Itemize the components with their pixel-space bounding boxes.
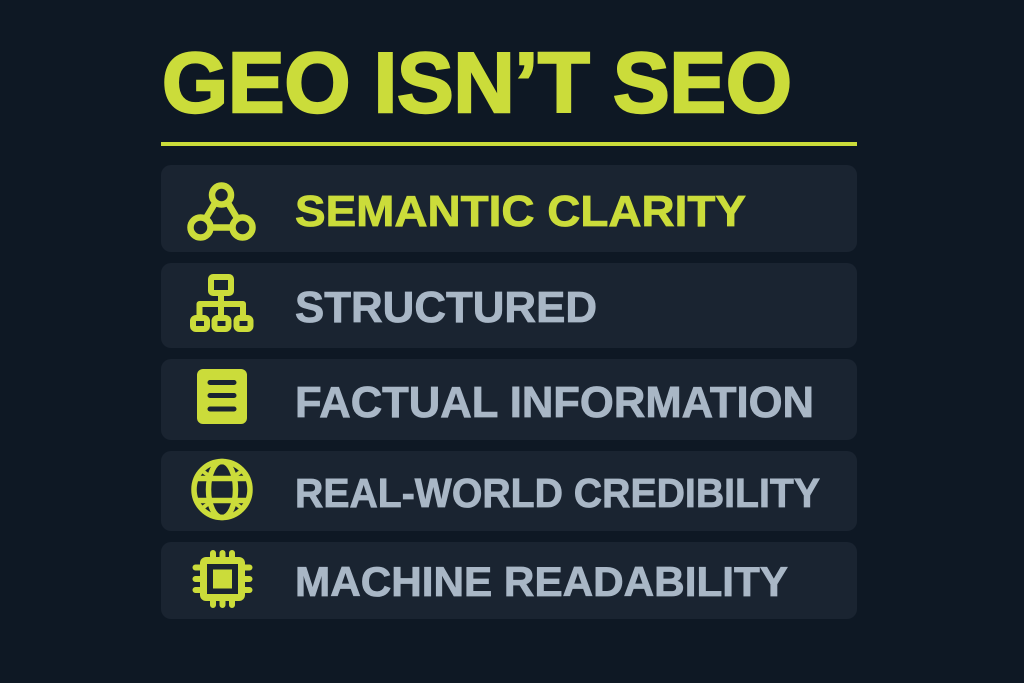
label: real-world credibility: REAL-WORLD CREDIBILITY xyxy=(295,470,820,516)
label: structured: STRUCTURED xyxy=(295,283,597,332)
label: machine readability: MACHINE READABILITY xyxy=(295,558,788,605)
icon: document xyxy=(197,369,247,424)
label: semantic clarity: SEMANTIC CLARITY xyxy=(295,187,746,236)
panel: real-world credibility xyxy=(161,451,857,531)
icon: connected nodes xyxy=(190,186,252,238)
title: GEO ISN’T SEO xyxy=(162,36,792,131)
panel: factual information xyxy=(161,359,857,440)
icon: chip xyxy=(196,553,250,605)
icon: hierarchy xyxy=(193,277,250,329)
panel: structured xyxy=(161,263,857,348)
panel: semantic clarity xyxy=(161,165,857,252)
panel: machine readability xyxy=(161,542,857,619)
title underline xyxy=(161,142,857,146)
icon: globe xyxy=(194,462,250,518)
label: factual information: FACTUAL INFORMATION xyxy=(295,378,814,427)
